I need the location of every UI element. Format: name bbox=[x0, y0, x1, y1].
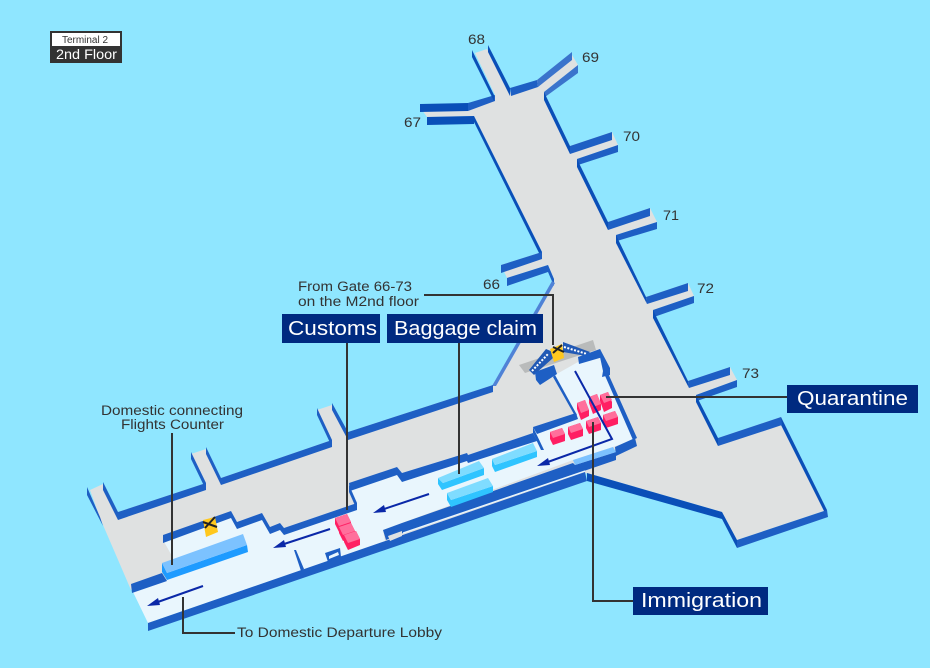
gate numbers: 67 bbox=[404, 114, 421, 130]
arrivals hall floor bbox=[133, 355, 633, 623]
light strip on wall bbox=[573, 447, 616, 465]
security icon at stairs bbox=[550, 344, 564, 362]
label: Quarantine bbox=[787, 385, 918, 413]
flow arrow: baggage to customs bbox=[373, 494, 429, 513]
lobby stub wall bbox=[131, 573, 167, 593]
gate 69 walls bbox=[537, 52, 578, 97]
gate 72 walls bbox=[646, 283, 694, 317]
domestic connecting flights counter bbox=[162, 534, 248, 580]
label: Baggage claim: Baggage claim bbox=[394, 318, 537, 340]
north wall east section bbox=[533, 413, 578, 434]
west gate walls bbox=[87, 403, 348, 526]
note: from gate 66-73 bbox=[298, 279, 420, 309]
east lobby walls bbox=[718, 417, 828, 548]
note: from gate 66-73: From Gate 66-73 bbox=[298, 279, 412, 294]
note: domestic connecting flights counter: Domestic connecting bbox=[101, 403, 243, 418]
label: Immigration bbox=[633, 587, 768, 615]
south inner wall bbox=[383, 452, 616, 540]
gate numbers: 70 bbox=[623, 128, 640, 144]
hall walls bbox=[131, 349, 637, 631]
customs booths bbox=[335, 514, 360, 550]
security icon west bbox=[203, 517, 218, 537]
gate numbers: 71 bbox=[663, 207, 679, 223]
connector wall bbox=[492, 281, 555, 386]
south east wall bbox=[615, 438, 637, 456]
gate numbers: 66 bbox=[483, 276, 500, 292]
note: domestic connecting flights counter bbox=[101, 403, 243, 432]
label: Customs bbox=[282, 314, 380, 343]
concourse outer walls bbox=[87, 45, 828, 548]
baggage claim belts bbox=[438, 443, 537, 507]
flow arrow: neck to hall bbox=[537, 371, 612, 466]
escalators bbox=[529, 342, 590, 375]
gate numbers bbox=[404, 31, 759, 381]
pier side walls bbox=[474, 92, 827, 548]
note: domestic connecting flights counter: Flights Counter bbox=[121, 417, 225, 432]
neck left stub bbox=[535, 365, 557, 385]
neck east shoulder bbox=[600, 349, 610, 377]
label: Customs: Customs bbox=[288, 318, 377, 340]
floor badge: Terminal 2, 2nd Floor bbox=[50, 31, 122, 63]
gate 71 walls bbox=[608, 208, 657, 241]
north wall west section bbox=[163, 503, 357, 543]
gate numbers: 68 bbox=[468, 31, 485, 47]
quarantine booths bbox=[577, 392, 612, 420]
leader lines bbox=[172, 295, 787, 633]
neck right stub bbox=[578, 349, 603, 364]
gate numbers: 72 bbox=[697, 280, 714, 296]
thin white gap bbox=[403, 471, 585, 533]
terminal concourse floor bbox=[90, 49, 827, 590]
gate 66 walls bbox=[501, 252, 554, 286]
gate numbers: 73 bbox=[742, 365, 759, 381]
immigration booths bbox=[550, 411, 618, 445]
neck west wall bbox=[553, 375, 577, 416]
flow arrow: customs to west bbox=[273, 529, 330, 548]
north wall end bbox=[349, 485, 357, 510]
gate 68 walls bbox=[468, 45, 538, 111]
south outer wall bbox=[148, 472, 587, 631]
flow arrow: to domestic lobby bbox=[147, 586, 203, 606]
gate 67 walls bbox=[420, 103, 474, 125]
floor badge: Terminal 2, 2nd Floor: Terminal 2 bbox=[62, 35, 108, 46]
label: Quarantine: Quarantine bbox=[797, 388, 908, 410]
gate 70 walls bbox=[570, 132, 618, 165]
south pier wall bbox=[587, 473, 722, 519]
north wall middle section bbox=[349, 433, 537, 491]
east wall bbox=[603, 371, 637, 440]
north corridor wall bbox=[348, 385, 493, 440]
small box bbox=[325, 548, 341, 562]
label: Baggage claim bbox=[387, 314, 543, 343]
gate numbers: 69 bbox=[582, 49, 599, 65]
note: from gate 66-73: on the M2nd floor bbox=[298, 294, 420, 309]
interior partition bbox=[294, 550, 304, 571]
note: to domestic departure lobby: To Domestic Departure Lobby bbox=[237, 625, 442, 640]
grey stairs pad bbox=[519, 340, 596, 373]
floor badge: Terminal 2, 2nd Floor: 2nd Floor bbox=[56, 46, 117, 62]
gate 73 walls bbox=[688, 367, 737, 401]
small notch bbox=[388, 531, 402, 541]
label: Immigration: Immigration bbox=[641, 590, 762, 612]
